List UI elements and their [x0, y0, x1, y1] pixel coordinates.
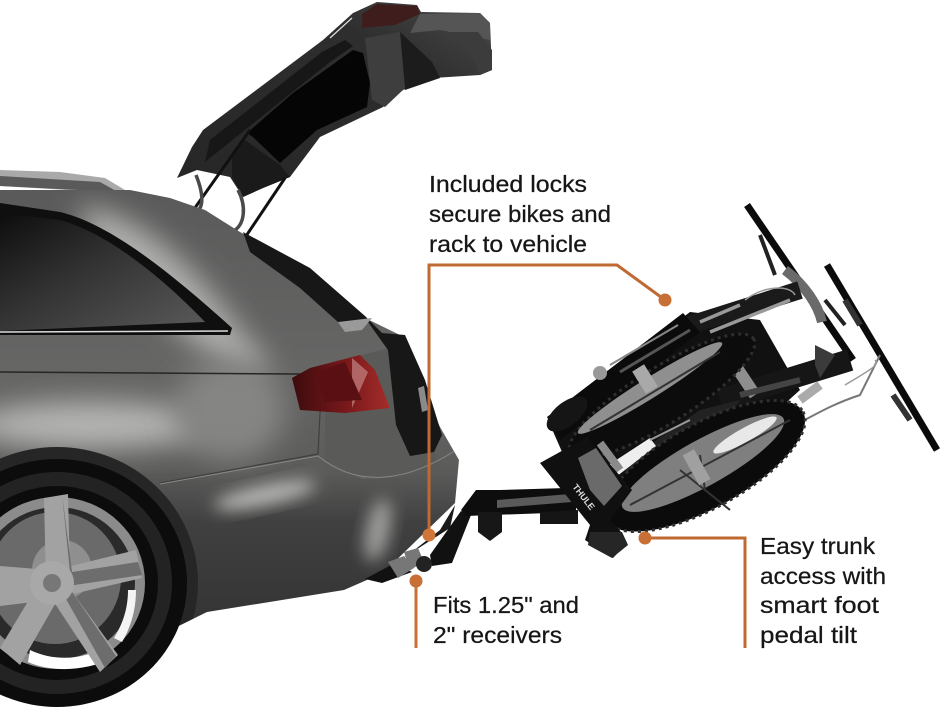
- taillight: [292, 355, 390, 413]
- callout text: foot pedal: pedal tilt: [760, 622, 858, 648]
- callout line: foot pedal: [638, 532, 745, 648]
- callout text: locks: [429, 171, 611, 257]
- upper bike wheel: [556, 315, 768, 477]
- Thule rack base: [540, 437, 632, 558]
- hitch and rack arm: [416, 488, 578, 572]
- callout text: foot pedal: [760, 533, 886, 648]
- bike frames: [690, 288, 876, 400]
- Thule rack base: THULE: [570, 482, 597, 512]
- dark mass behind bikes: [548, 312, 800, 525]
- callout text: locks: secure bikes and: [429, 201, 611, 227]
- rear wheel: [0, 459, 187, 707]
- callout text: foot pedal: access with: [760, 563, 886, 589]
- callout line: receivers: [410, 574, 422, 648]
- trunk opening: [243, 232, 442, 456]
- car body: [0, 170, 459, 711]
- callout text: locks: Included locks: [429, 171, 587, 197]
- callout line: locks: [422, 265, 672, 542]
- top rack arm: [541, 313, 700, 440]
- callout text: receivers: Fits 1.25" and: [433, 592, 579, 618]
- callout text: locks: rack to vehicle: [429, 231, 587, 257]
- lower bike wheel: [587, 375, 823, 557]
- bumper underside and exhausts: [365, 505, 455, 583]
- callout text: receivers: [433, 592, 579, 648]
- callout text: receivers: 2" receivers: [433, 622, 562, 648]
- bike rack and bikes: [540, 205, 937, 558]
- callout text: foot pedal: smart foot: [760, 592, 880, 618]
- callout text: foot pedal: Easy trunk: [760, 533, 876, 559]
- upper bike handlebar: [747, 205, 853, 360]
- rear side window: [0, 203, 232, 335]
- lower bike handlebar: [795, 265, 937, 450]
- middle frame and crank: [600, 400, 740, 486]
- open tailgate: [177, 2, 492, 245]
